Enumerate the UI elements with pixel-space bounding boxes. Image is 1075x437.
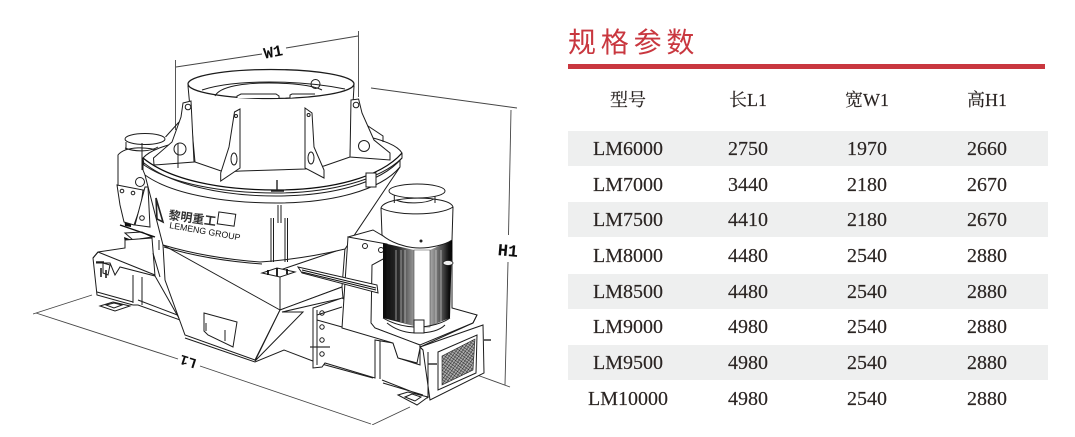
row LM9500: 4980 bbox=[728, 352, 768, 374]
row LM9500 bbox=[568, 345, 1048, 380]
upper cone with ribs bbox=[154, 70, 390, 181]
row LM8000 bbox=[593, 245, 1007, 267]
crusher body bbox=[143, 155, 400, 264]
slide rail bbox=[298, 267, 378, 293]
row LM7000: 3440 bbox=[728, 174, 768, 196]
title rule bbox=[568, 64, 1045, 69]
right motor mounting plate bbox=[342, 230, 477, 363]
row LM6000: LM6000 bbox=[593, 138, 663, 160]
row LM8500: 2880 bbox=[967, 281, 1007, 303]
mounting flange bbox=[262, 268, 295, 277]
row LM6000: 2660 bbox=[967, 138, 1007, 160]
row LM9000 bbox=[593, 316, 1007, 338]
rim flange bbox=[143, 135, 402, 196]
title: 规格参数 bbox=[568, 21, 699, 61]
row LM9000: 4980 bbox=[728, 316, 768, 338]
row LM7000: 2180 bbox=[847, 174, 887, 196]
row LM9500: 2880 bbox=[967, 352, 1007, 374]
row LM8500 bbox=[568, 274, 1048, 309]
dimension W1: W1 bbox=[262, 42, 285, 64]
inner left rib bbox=[221, 109, 240, 181]
right drive motor bbox=[381, 184, 453, 333]
dimension L1 bbox=[33, 295, 410, 425]
right large rib bbox=[350, 99, 390, 160]
row LM8000: 2880 bbox=[967, 245, 1007, 267]
table header: 宽W1 bbox=[845, 90, 889, 110]
motor fins bbox=[383, 243, 414, 326]
row LM7000 bbox=[593, 174, 1007, 196]
row LM10000: 4980 bbox=[728, 388, 768, 410]
row LM7500: 4410 bbox=[728, 209, 768, 231]
row LM7500 bbox=[568, 202, 1048, 237]
motor fan housing bbox=[381, 198, 453, 248]
row LM8500: LM8500 bbox=[593, 281, 663, 303]
dimension H1 bbox=[371, 88, 519, 387]
row LM6000: 1970 bbox=[847, 138, 887, 160]
row LM7000: 2670 bbox=[967, 174, 1007, 196]
row LM9500: LM9500 bbox=[593, 352, 663, 374]
row LM10000 bbox=[588, 388, 1007, 410]
brand logo and LEMENG GROUP: 黎明重工 bbox=[167, 206, 217, 230]
table header: 长L1 bbox=[729, 90, 767, 110]
row LM8000: 4480 bbox=[728, 245, 768, 267]
row LM7500: 2670 bbox=[967, 209, 1007, 231]
row LM8000: 2540 bbox=[847, 245, 887, 267]
left base frame bbox=[93, 238, 180, 320]
row LM10000: 2540 bbox=[847, 388, 887, 410]
brand logo and LEMENG GROUP bbox=[156, 198, 241, 242]
left drive motor bbox=[117, 134, 165, 250]
dimension L1: L1 bbox=[178, 350, 199, 370]
row LM9000: LM9000 bbox=[593, 316, 663, 338]
dimension H1: H1 bbox=[497, 242, 519, 263]
row LM6000: 2750 bbox=[728, 138, 768, 160]
table header: 高H1 bbox=[967, 90, 1007, 110]
inspection door bbox=[204, 313, 237, 347]
row LM9000: 2540 bbox=[847, 316, 887, 338]
row LM7500: 2180 bbox=[847, 209, 887, 231]
table header bbox=[610, 90, 1007, 110]
table header: 型号 bbox=[610, 90, 646, 110]
row LM6000 bbox=[568, 131, 1048, 166]
row LM8500: 4480 bbox=[728, 281, 768, 303]
dimension W1 bbox=[176, 31, 358, 130]
row LM8000: LM8000 bbox=[593, 245, 663, 267]
right end box with grille bbox=[398, 315, 491, 405]
brand logo and LEMENG GROUP: LEMENG GROUP bbox=[169, 220, 241, 242]
right base frame bbox=[310, 298, 428, 398]
lower hopper bbox=[163, 245, 373, 378]
row LM8500: 2540 bbox=[847, 281, 887, 303]
row LM7500: LM7500 bbox=[593, 209, 663, 231]
row LM9500: 2540 bbox=[847, 352, 887, 374]
row LM9000: 2880 bbox=[967, 316, 1007, 338]
row LM10000: LM10000 bbox=[588, 388, 668, 410]
left large rib bbox=[154, 101, 194, 165]
ventilation grille bbox=[442, 339, 475, 385]
inner right rib bbox=[305, 108, 324, 178]
row LM7000: LM7000 bbox=[593, 174, 663, 196]
row LM10000: 2880 bbox=[967, 388, 1007, 410]
